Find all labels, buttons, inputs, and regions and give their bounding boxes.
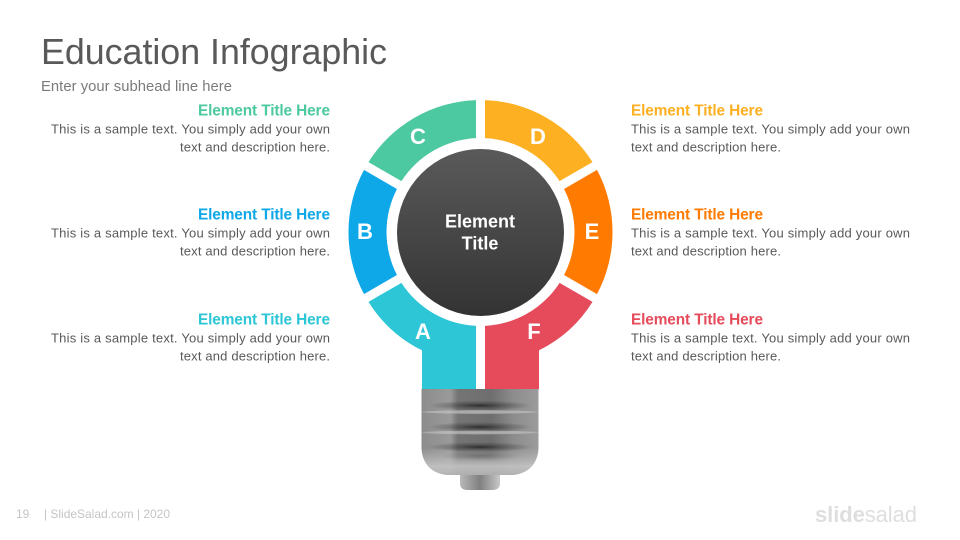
text block: B: This is a sample text. You simply add your own bbox=[51, 226, 330, 240]
segment letters: A bbox=[415, 319, 431, 344]
title: Education Infographic bbox=[41, 32, 387, 72]
logo: slidesalad bbox=[815, 502, 917, 527]
text block: A: This is a sample text. You simply add your own bbox=[51, 330, 330, 346]
footer: 19 bbox=[16, 507, 30, 521]
text block: F: text and description here. bbox=[631, 348, 781, 364]
text block: D: text and description here. bbox=[631, 140, 781, 154]
center label: Title bbox=[462, 234, 498, 254]
segment letters: C bbox=[410, 124, 426, 149]
text block: C: text and description here. bbox=[180, 140, 330, 154]
segment letters: D bbox=[530, 124, 546, 149]
text block: C bbox=[51, 102, 330, 154]
text block: A: text and description here. bbox=[180, 348, 330, 364]
segment E bbox=[564, 170, 613, 294]
text block: B bbox=[51, 206, 330, 258]
center label: Element bbox=[445, 212, 515, 232]
text block: F: This is a sample text. You simply add your own bbox=[631, 330, 910, 346]
text block: E: This is a sample text. You simply add your own bbox=[631, 226, 910, 240]
bulb tip bbox=[460, 470, 500, 490]
segment B bbox=[348, 170, 397, 294]
text block: E: text and description here. bbox=[631, 244, 781, 258]
text block: C: This is a sample text. You simply add your own bbox=[51, 122, 330, 136]
text block: F: Element Title Here bbox=[631, 312, 763, 328]
text block: B: Element Title Here bbox=[198, 206, 330, 224]
text block: A bbox=[51, 312, 330, 364]
segment letters bbox=[357, 124, 599, 344]
center label bbox=[445, 212, 515, 254]
text block: F bbox=[631, 312, 910, 364]
segment letters: E bbox=[585, 219, 599, 244]
segment C bbox=[368, 100, 476, 181]
text block: E bbox=[631, 206, 910, 258]
bulb threaded body bbox=[418, 389, 542, 476]
subhead: Enter your subhead line here bbox=[41, 79, 232, 95]
segment letters: F bbox=[527, 319, 541, 344]
text block: A: Element Title Here bbox=[198, 312, 330, 328]
segment F bbox=[485, 283, 592, 389]
icon: light bulb screw base bbox=[418, 389, 542, 490]
segment letters: B bbox=[357, 219, 373, 244]
text block: B: text and description here. bbox=[180, 244, 330, 258]
text block: D bbox=[631, 102, 910, 154]
text block: D: Element Title Here bbox=[631, 102, 763, 120]
text block: D: This is a sample text. You simply add your own bbox=[631, 122, 910, 136]
segment A bbox=[368, 283, 476, 389]
center circle bbox=[397, 149, 564, 316]
footer: | SlideSalad.com | 2020 bbox=[44, 507, 170, 521]
text block: C: Element Title Here bbox=[198, 102, 330, 120]
text block: E: Element Title Here bbox=[631, 206, 763, 224]
segment D bbox=[485, 100, 592, 181]
